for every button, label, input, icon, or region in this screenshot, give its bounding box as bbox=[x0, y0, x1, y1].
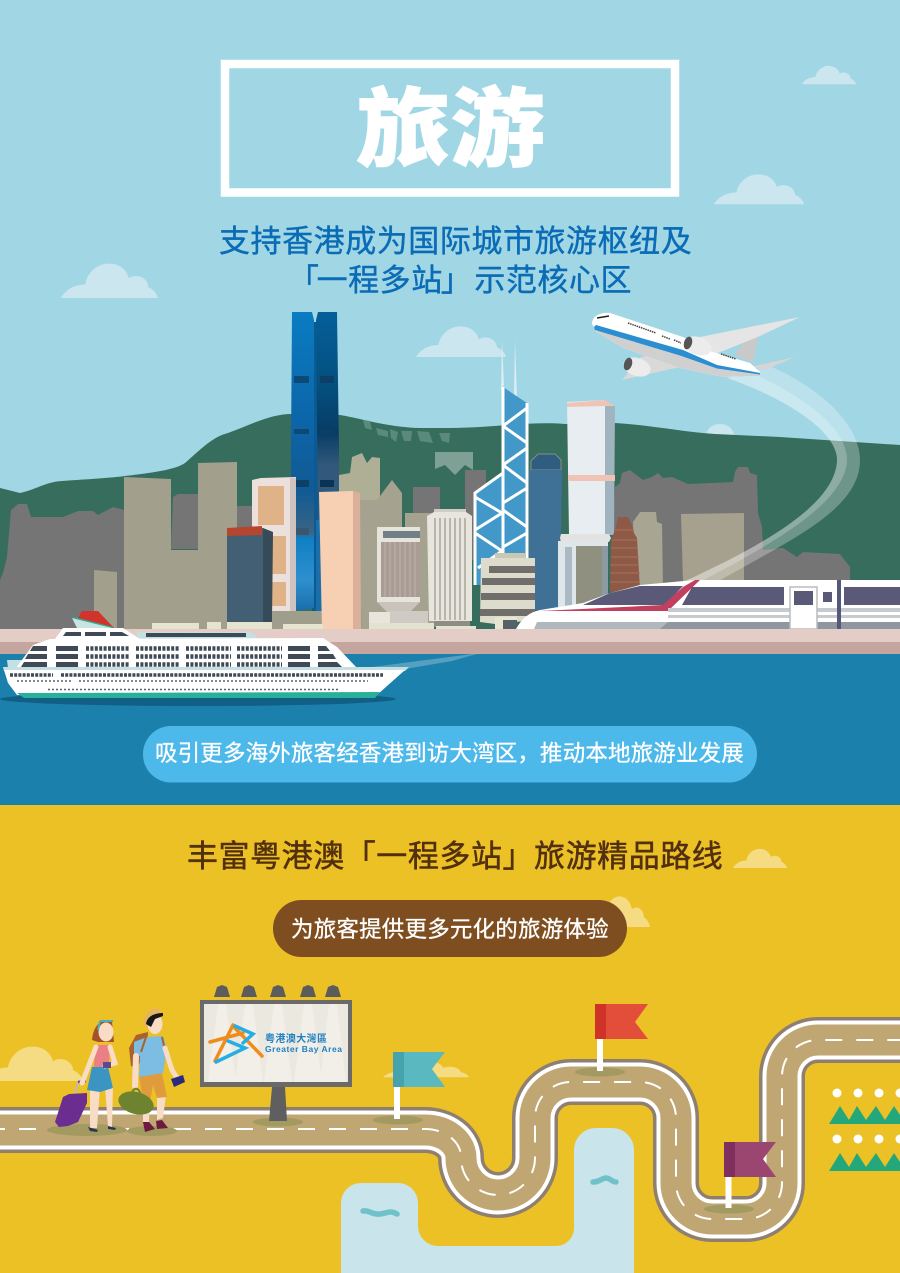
tan tower right bbox=[633, 512, 663, 587]
tan block right bbox=[681, 513, 744, 582]
billboard text: 粤港澳大灣區 bbox=[265, 1032, 327, 1045]
ground block bbox=[272, 611, 362, 629]
gray skyline left bbox=[0, 504, 124, 640]
bank of china tower bbox=[475, 340, 527, 585]
tan block mid bbox=[405, 513, 450, 623]
cloud centre bbox=[416, 326, 506, 357]
dark blue tower bbox=[227, 526, 273, 622]
hill trees bbox=[363, 420, 450, 443]
far building patch bbox=[435, 452, 473, 475]
tan tower mid bbox=[360, 480, 402, 630]
cloud right bbox=[714, 174, 804, 204]
mountain bbox=[0, 414, 900, 640]
yellow cloud behind pill bbox=[590, 896, 650, 927]
promenade bbox=[0, 629, 900, 654]
yellow heading: 丰富粤港澳「一程多站」旅游精品路线 bbox=[187, 839, 723, 874]
gray tower mid bbox=[413, 487, 440, 547]
billboard text: Greater Bay Area bbox=[265, 1044, 342, 1054]
high speed train bbox=[516, 580, 900, 629]
subtitle: 「一程多站」示范核心区 bbox=[288, 263, 632, 298]
teal flag bbox=[373, 1052, 445, 1124]
road bbox=[0, 1040, 900, 1219]
gray block bbox=[237, 506, 255, 626]
peach tower bbox=[319, 491, 361, 629]
contrail bbox=[683, 366, 860, 582]
yellow cloud mid bbox=[383, 1061, 469, 1077]
traveller woman bbox=[47, 1020, 127, 1136]
water bbox=[341, 1128, 634, 1273]
ship wake bbox=[365, 653, 480, 669]
yellow cloud by heading bbox=[733, 849, 787, 868]
waterfront low blocks bbox=[152, 622, 323, 630]
title text: 旅游 bbox=[357, 82, 544, 178]
tan block left small bbox=[94, 570, 117, 640]
gray tower bbox=[171, 494, 198, 549]
info pill blue: 吸引更多海外旅客经香港到访大湾区，推动本地旅游业发展 bbox=[155, 741, 744, 766]
gray mid back bbox=[465, 470, 486, 560]
yellow cloud left bbox=[0, 1047, 83, 1081]
cloud left bbox=[61, 264, 158, 298]
logo bbox=[210, 1025, 262, 1062]
title box bbox=[225, 64, 675, 192]
striped building bbox=[480, 553, 535, 629]
white tower with bands bbox=[558, 400, 615, 609]
tan block big bbox=[124, 462, 237, 640]
subtitle bbox=[219, 224, 692, 298]
brick tower bbox=[610, 517, 640, 592]
traveller man bbox=[116, 1008, 185, 1136]
cloud behind hill bbox=[706, 424, 734, 448]
sea bbox=[0, 654, 900, 805]
brown pill: 为旅客提供更多元化的旅游体验 bbox=[291, 917, 609, 942]
cruise ship bbox=[0, 611, 409, 706]
yellow background bbox=[0, 805, 900, 1273]
blue round tower bbox=[529, 454, 562, 610]
decorative dots bbox=[832, 1088, 900, 1144]
sky background bbox=[0, 0, 900, 655]
billboard bbox=[200, 985, 352, 1126]
wave right bbox=[593, 1178, 616, 1182]
white striped tower bbox=[427, 509, 476, 629]
cloud top right bbox=[802, 66, 856, 84]
billboard text bbox=[265, 1032, 342, 1054]
red flag bbox=[575, 1004, 648, 1076]
info pill blue bbox=[143, 726, 757, 782]
green triangles bbox=[829, 1106, 900, 1171]
brown pill bbox=[273, 900, 627, 957]
purple flag bbox=[704, 1142, 776, 1214]
blue skyscraper bbox=[291, 312, 339, 612]
white building with grille bbox=[369, 527, 434, 629]
subtitle: 支持香港成为国际城市旅游枢纽及 bbox=[219, 224, 692, 259]
wave left bbox=[363, 1211, 397, 1214]
pale tan cluster bbox=[339, 453, 380, 630]
airplane bbox=[592, 313, 800, 380]
gray skyline right bbox=[610, 467, 850, 590]
pink tower bbox=[252, 477, 296, 619]
